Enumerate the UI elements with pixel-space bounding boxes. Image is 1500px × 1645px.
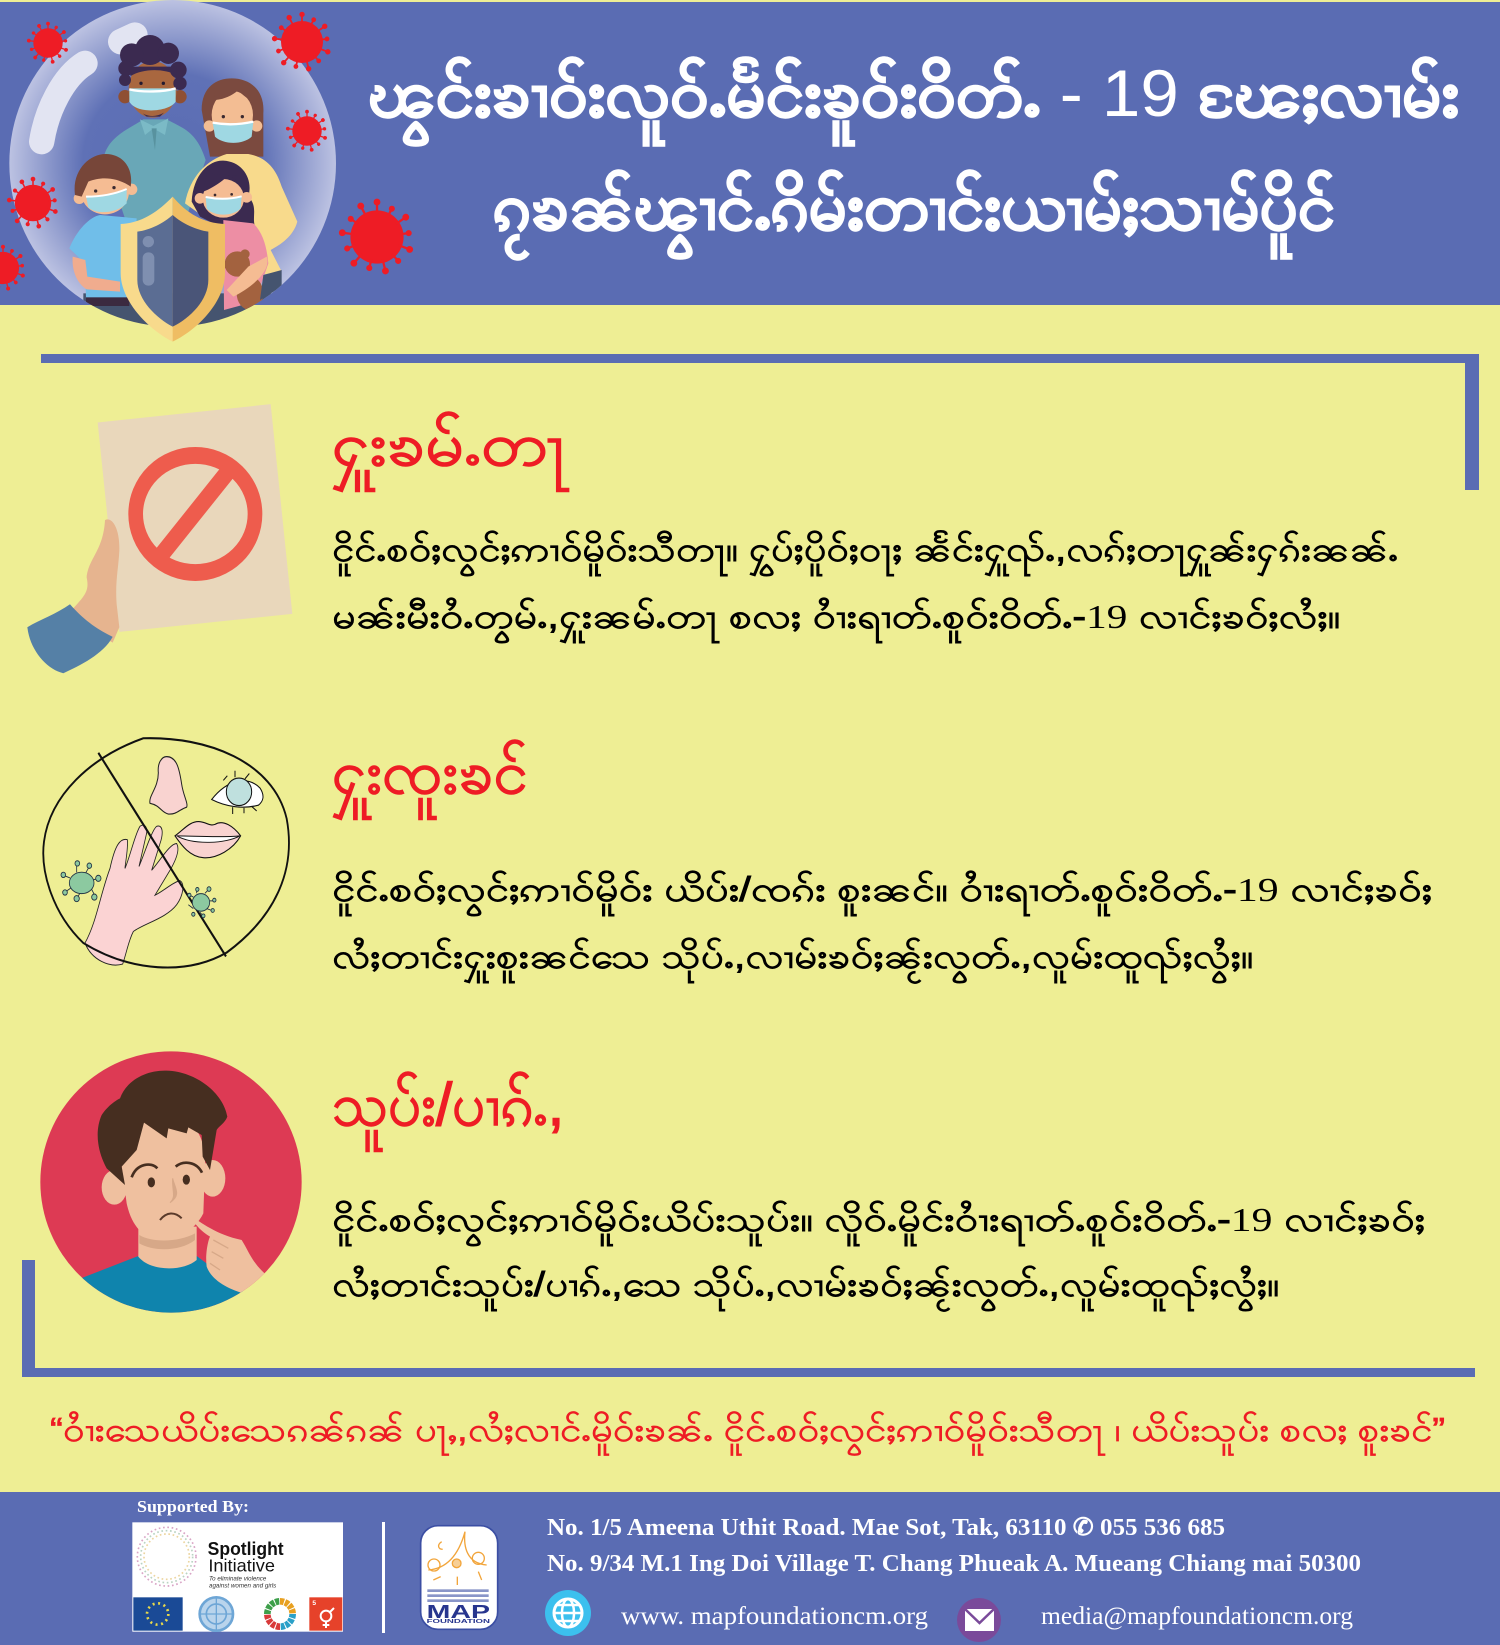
icon: globe: [545, 1590, 591, 1636]
text: section 1 body: မၼ်းမီးဝႆႉတွမ်ႉ,ႁူးၼမ်ႉတႃ စလႈ ဝၢႆးရၢတ်ႉစူဝ်းဝိတ်ႉ- 19 လၢင်ႈၶဝ်ႈလႆႈ။: [332, 598, 1340, 643]
icon: hand holding prohibition sign: [27, 404, 292, 673]
text: section 2 body: [332, 871, 1432, 983]
footer band: [0, 1492, 1500, 1645]
icon: green germ left: [61, 861, 101, 902]
frame: left and bottom bracket: [22, 1260, 1475, 1377]
text: address lines: No. 9/34 M.1 Ing Doi Village T. Chang Phueak A. Mueang Chiang mai 50300: [547, 1551, 1361, 1577]
heading: section 3: သူပ်း/ပၢၵ်ႉ,: [332, 1071, 564, 1151]
shield: [121, 197, 225, 342]
icon: gender equality: [309, 1597, 342, 1631]
logo: MAP Foundation: [421, 1526, 498, 1629]
text: website: www. mapfoundationcm.org: [621, 1603, 929, 1630]
icon: boy touching face: [40, 1051, 302, 1327]
text: email: media@mapfoundationcm.org: [1041, 1603, 1353, 1630]
icon: green germ right: [188, 887, 216, 918]
heading: section 1: ႁူးၶမ်ႉတႃ: [332, 411, 570, 492]
text: section 2 body: လႆႈတၢင်းႁူးစူးၼင်သေ သိုပ်ႉ,လၢမ်းၶဝ်ႈၼႂ်းလွတ်ႉ,လူမ်းထူၺ်ႈလွႆႈ။: [332, 938, 1253, 983]
logo: Spotlight Initiative and partners: To eliminate violence: [209, 1576, 267, 1583]
title: ၵႂၶၼ်ၽွၢင်ႉၵိမ်းတၢင်းယၢမ်ႈသၢမ်ပိူင်: [493, 168, 1335, 261]
boy: [69, 215, 137, 298]
text: section 2 body: ငိူင်ႉစဝ်ႈလွင်ႈဢၢဝ်မိူဝ်း ယိပ်း/ၸၵ်း စူးၼင်။ ဝၢႆးရၢတ်ႉစူဝ်းဝိတ်ႉ- 19 လၢင်ႈၶဝ်ႈ: [332, 871, 1432, 916]
logo: Spotlight Initiative and partners: [132, 1522, 343, 1632]
logo: Spotlight Initiative and partners: against women and girls: [209, 1582, 277, 1589]
icon: gender equality: 5: [312, 1600, 316, 1607]
dad: [104, 119, 206, 223]
virus particles around bubble: [0, 13, 413, 290]
icon: mail: [957, 1598, 1001, 1642]
text: section 3 body: [332, 1201, 1425, 1311]
heading: section 2: ႁူးၸူးၶင်: [332, 739, 528, 820]
text: address lines: No. 1/5 Ameena Uthit Road. Mae Sot, Tak, 63110 ✆ 055 536 685: [547, 1515, 1225, 1541]
logo: Spotlight Initiative and partners: Spotlight: [208, 1538, 284, 1559]
text: section 1 body: [332, 531, 1398, 643]
text: section 3 body: ငိူင်ႉစဝ်ႈလွင်ႈဢၢဝ်မိူဝ်းယိပ်းသူပ်း။ လိူဝ်ႉမိူင်းဝၢႆးရၢတ်ႉစူဝ်းဝိတ်ႉ- 19 လၢင်ႈၶဝ်ႈ: [332, 1201, 1425, 1246]
text: section 1 body: ငိူင်ႉစဝ်ႈလွင်ႈဢၢဝ်မိူဝ်းသီတႃ။ ႁွပ်ႈပိူဝ်ႈဝႃႈ ၼႅင်းႁူၺ်ႉ,လၵ်ႈတႃႁူၼ်းႁၵ်းၼၼ်ႉ: [332, 531, 1398, 576]
header band: [0, 2, 1500, 305]
title: [368, 55, 1459, 261]
text: supported by: Supported By:: [137, 1497, 249, 1516]
icon: do not touch face: [43, 738, 289, 967]
callout: closing quote: “ဝၢႆးသေယိပ်းသေၵၼ်ၵၼ် ပႃႇ,လႆႈလၢင်ႉမိူဝ်းၶၼ်ႉ ငိူင်ႉစဝ်ႈလွင်ႈဢၢဝ်မိူဝ်းသီတႃ ၊ ယိပ်းသူပ်း စလႈ စူးၶင်”: [50, 1411, 1445, 1456]
girl: [192, 161, 255, 227]
logo: Spotlight Initiative and partners: Initiative: [208, 1556, 275, 1576]
icon: SDG wheel: [267, 1601, 293, 1627]
teddy: [225, 251, 250, 277]
divider: [382, 1522, 385, 1633]
logo: MAP Foundation: MAP: [427, 1601, 490, 1622]
icon: EU flag: [133, 1597, 183, 1631]
icon: UN emblem: [200, 1597, 233, 1631]
title: ၽွင်းၶၢဝ်းလူဝ်ႉမႅင်းၶူဝ်းဝိတ်ႉ - 19 ၽႄႈလၢမ်း: [368, 55, 1459, 147]
text: address lines: [547, 1515, 1361, 1577]
text: section 3 body: လႆႈတၢင်းသူပ်း/ပၢၵ်ႉ,သေ သိုပ်ႉ,လၢမ်းၶဝ်ႈၼႂ်းလွတ်ႉ,လူမ်းထူၺ်ႈလွႆႈ။: [332, 1266, 1279, 1311]
logo: MAP Foundation: FOUNDATION: [427, 1619, 490, 1625]
frame: top and right bracket: [41, 354, 1479, 490]
mom: [202, 78, 263, 157]
illustration: family inside protective bubble: [9, 0, 336, 342]
